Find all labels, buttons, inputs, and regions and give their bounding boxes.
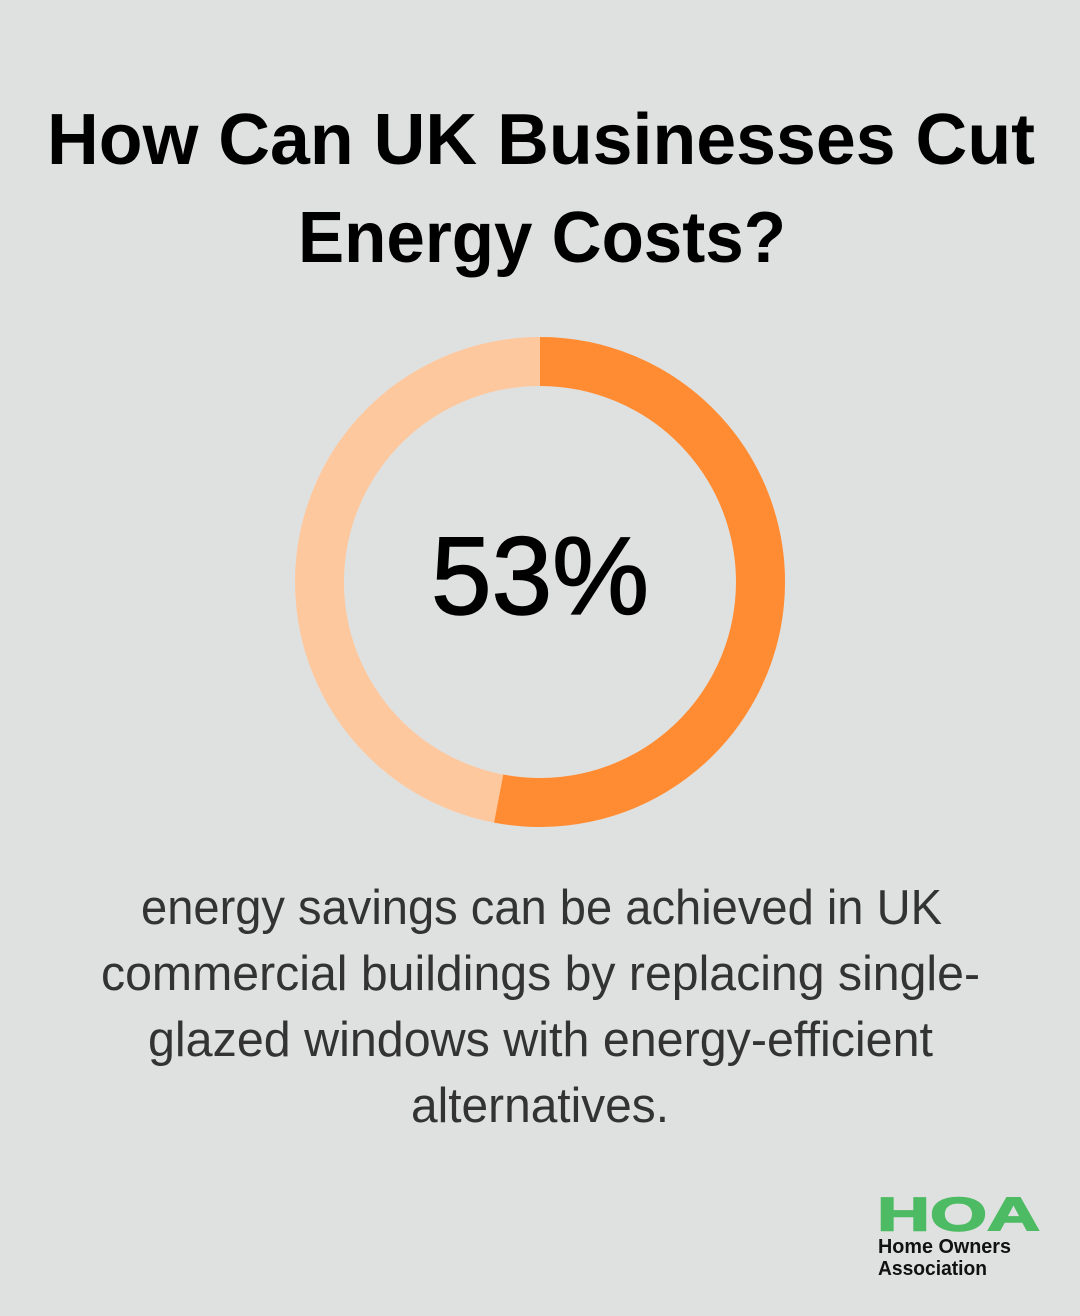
logo: HOA Home Owners Association: [877, 1188, 1040, 1280]
logo: HOA Home Owners Association: HOA: [877, 1188, 1040, 1240]
description text: alternatives.: [411, 1079, 669, 1133]
title: Energy Costs?: [298, 198, 786, 278]
logo: HOA Home Owners Association: Home Owners: [878, 1236, 1011, 1258]
title: How Can UK Businesses Cut: [47, 100, 1035, 180]
description text: [101, 881, 980, 1133]
description text: energy savings can be achieved in UK: [141, 881, 942, 935]
description text: glazed windows with energy-efficient: [148, 1013, 933, 1067]
logo: HOA Home Owners Association: Association: [878, 1258, 987, 1280]
description text: commercial buildings by replacing single-: [101, 947, 980, 1001]
donut chart: 53%: [320, 362, 760, 803]
big percentage: 53%: [431, 515, 649, 638]
title: [47, 100, 1035, 278]
